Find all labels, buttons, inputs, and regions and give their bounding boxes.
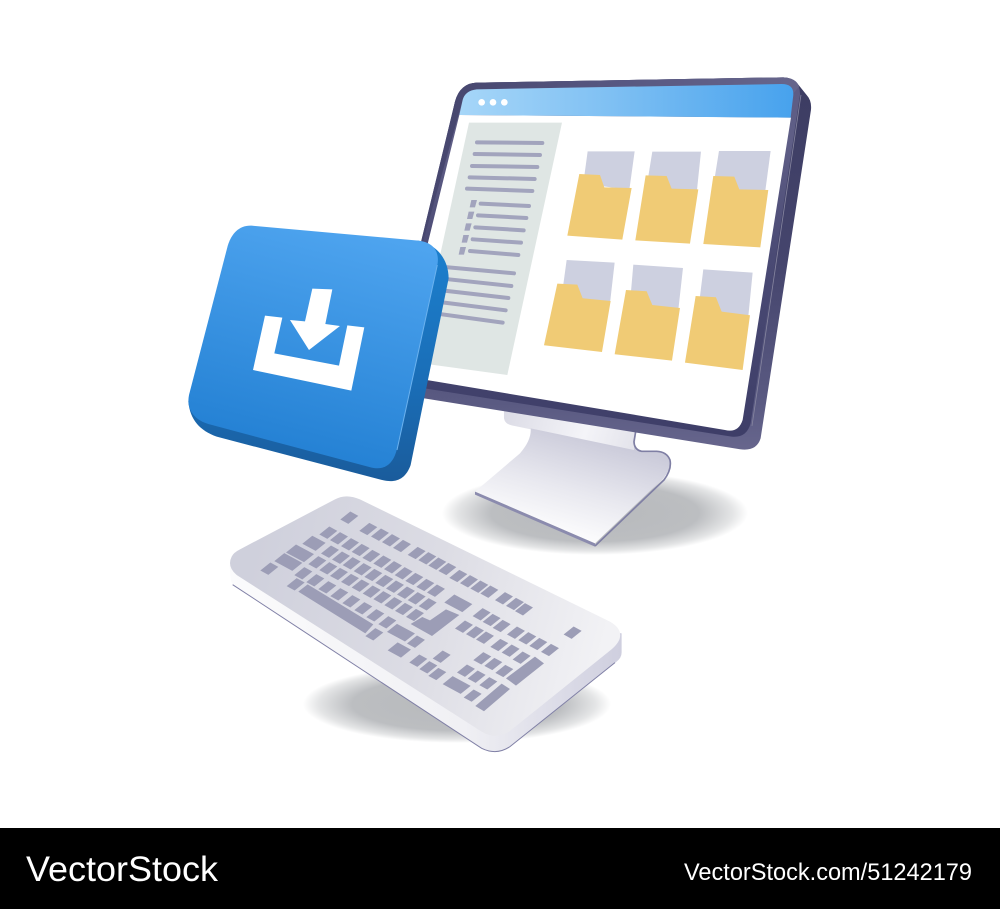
stand neck bbox=[504, 408, 637, 451]
folder 1 bbox=[567, 151, 635, 240]
monitor stand bbox=[475, 408, 670, 547]
arrow bbox=[290, 289, 340, 350]
window title bar bbox=[459, 84, 793, 118]
sidebar list bullets bbox=[459, 200, 477, 255]
sidebar text lines bbox=[420, 142, 542, 323]
image id url: VectorStock.com/51242179 bbox=[684, 859, 972, 886]
download app icon bbox=[188, 226, 449, 481]
file sidebar bbox=[417, 123, 562, 375]
folders grid bbox=[544, 151, 771, 370]
monitor front frame bbox=[392, 77, 800, 437]
stand base edge bbox=[475, 492, 595, 547]
keyboard shadow bbox=[303, 665, 611, 743]
window control dots bbox=[478, 99, 508, 106]
monitor bbox=[392, 77, 811, 450]
stand right edge bbox=[595, 432, 670, 546]
keyboard body side bbox=[230, 565, 622, 752]
folder 2 bbox=[635, 152, 701, 244]
function keys bbox=[359, 523, 533, 615]
space bar bbox=[298, 584, 373, 633]
screen bbox=[397, 115, 791, 431]
monitor top bezel bbox=[392, 77, 799, 363]
download symbol bbox=[253, 289, 364, 391]
brand name: VectorStock bbox=[26, 850, 219, 889]
icon side bbox=[188, 240, 449, 481]
main typing keys bbox=[260, 526, 472, 658]
footer bar bbox=[0, 828, 1000, 909]
enter key bbox=[411, 609, 459, 636]
folder 5 bbox=[615, 265, 683, 361]
icon face bbox=[188, 226, 438, 468]
folder 6 bbox=[685, 269, 753, 370]
numeric keypad bbox=[443, 626, 582, 711]
keyboard top surface bbox=[230, 496, 620, 736]
navigation and arrow keys bbox=[409, 608, 511, 680]
monitor shadow bbox=[442, 471, 748, 555]
stand base bbox=[475, 428, 670, 543]
tray bbox=[253, 316, 364, 391]
keys bbox=[260, 511, 582, 711]
folder 3 bbox=[703, 151, 771, 247]
keyboard bbox=[230, 496, 622, 752]
folder 4 bbox=[544, 260, 615, 352]
monitor back rim bbox=[397, 77, 811, 450]
